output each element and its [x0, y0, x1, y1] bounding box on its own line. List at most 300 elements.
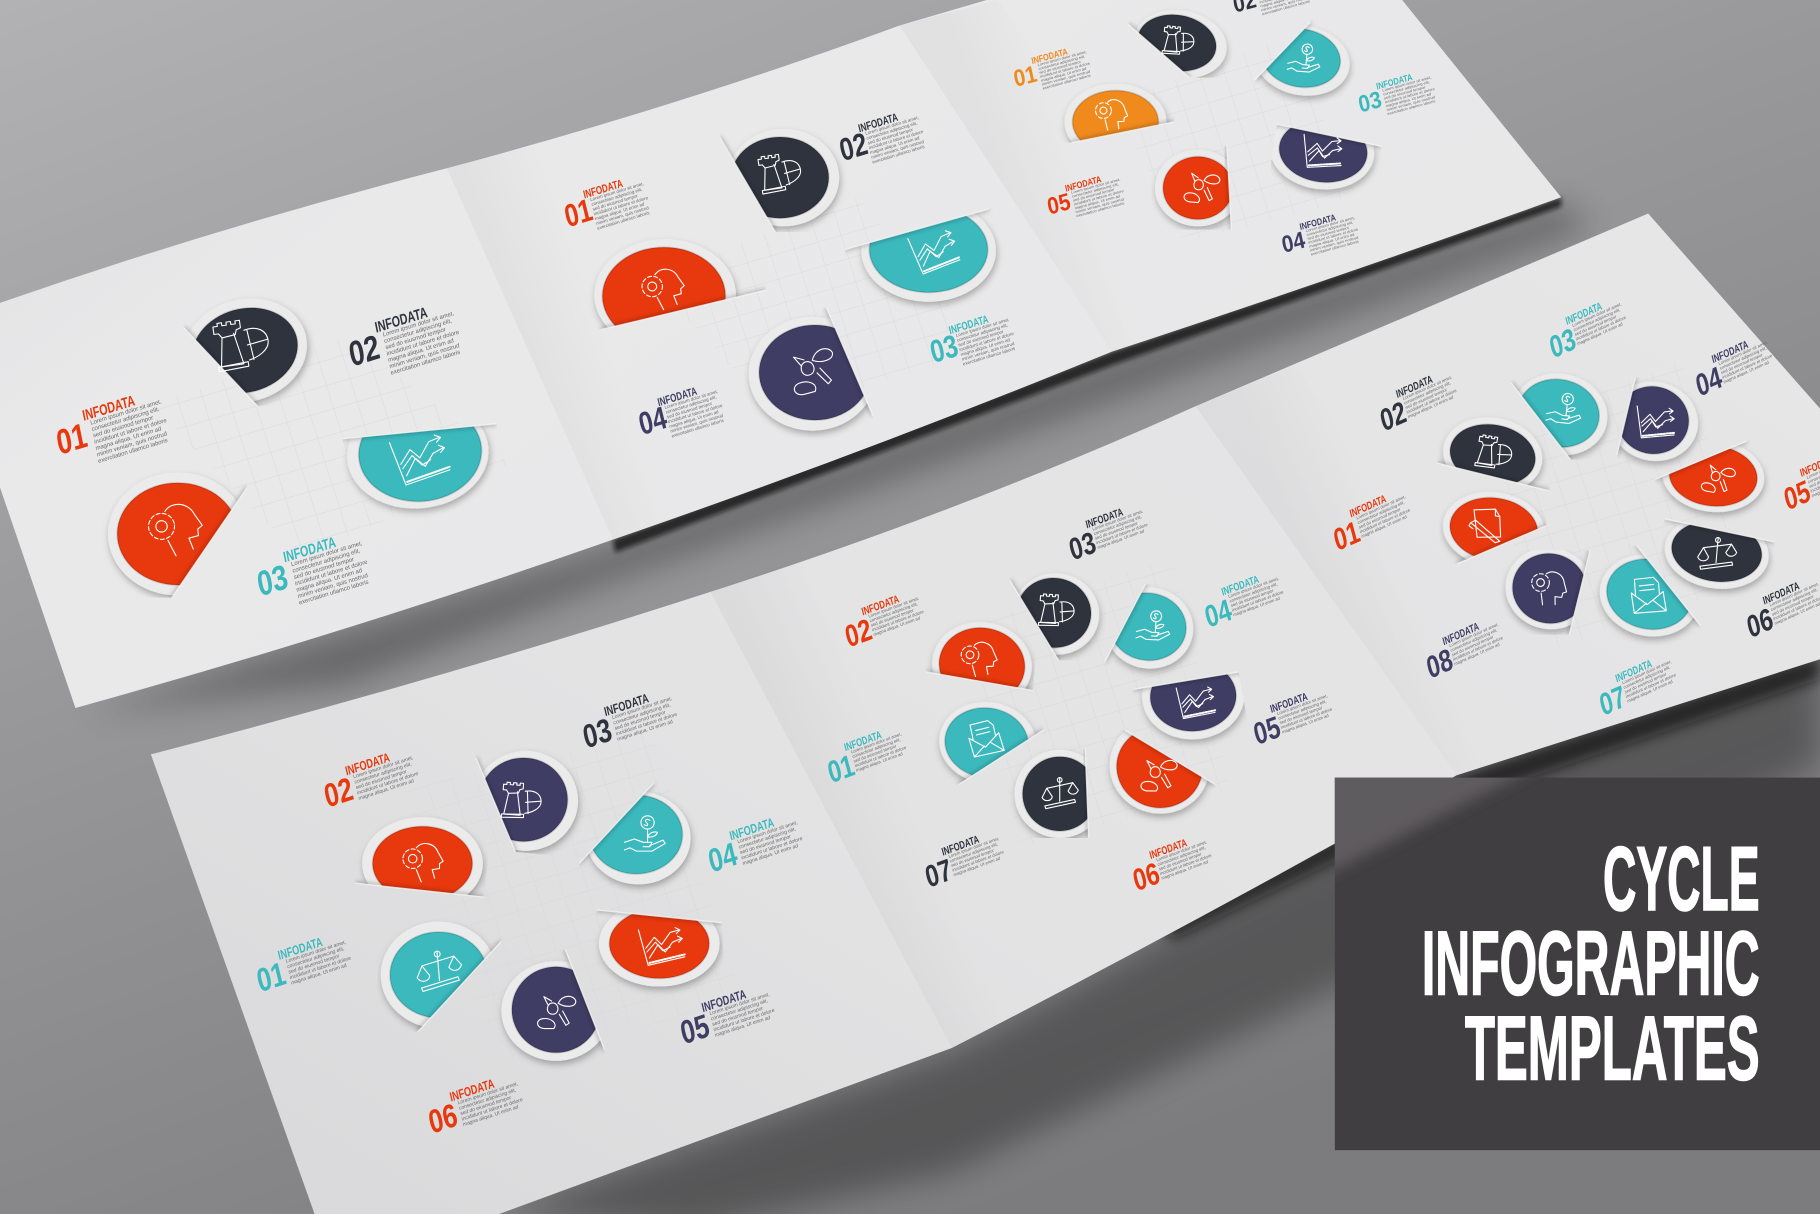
label 02 — [839, 586, 928, 654]
label 03: INFODATA — [1564, 300, 1604, 328]
label 07: magna aliqua. Ut enim ad — [1627, 678, 1674, 704]
panel: bottom sheet, seven step cycle — [822, 499, 1337, 898]
label 05: sed do eiusmod tempor — [1279, 705, 1323, 725]
label 02: INFODATA — [373, 303, 429, 336]
label 03 — [578, 684, 680, 756]
label 02: Lorem ipsum dolor sit amet, — [353, 755, 414, 780]
label 01: sed do eiusmod tempor — [592, 193, 639, 212]
label 03: INFODATA — [948, 313, 990, 338]
label 05: sed do eiusmod tempor — [1072, 187, 1116, 203]
label 02: minim veniam, quis nostrud — [389, 343, 460, 370]
label 05: Lorem ipsum dolor sit amet, — [1276, 693, 1328, 716]
label 02: exercitation ullamco laboris — [872, 144, 926, 165]
label 01: magna aliqua. Ut enim ad — [594, 201, 645, 221]
disc: teal envelope — [1596, 545, 1700, 644]
label 07 — [1594, 649, 1680, 723]
label 02: consectetur adipiscing elit, — [1403, 380, 1451, 406]
label 01: Lorem ipsum dolor sit amet, — [590, 181, 644, 202]
disc: navy scales — [1012, 748, 1090, 838]
disc: teal scales — [381, 922, 501, 1032]
title text — [1422, 829, 1760, 1099]
label 05: magna aliqua. Ut enim ad — [1074, 193, 1120, 210]
label 03: magna aliqua. Ut enim ad — [960, 337, 1011, 357]
label 06: consectetur adipiscing elit, — [1770, 587, 1818, 612]
label 01: consectetur adipiscing elit, — [1038, 54, 1085, 71]
label 04 — [634, 379, 727, 447]
shadow: upper sheet contact — [613, 197, 1561, 552]
label 03: magna aliqua. Ut enim ad — [617, 719, 674, 743]
label 04: 04 — [1201, 592, 1236, 634]
label 01: INFODATA — [81, 391, 137, 424]
label 03: exercitation ullamco laboris — [299, 579, 369, 607]
label 02: sed do eiusmod tempor — [870, 607, 915, 628]
label 03: consectetur adipiscing elit, — [613, 702, 671, 727]
label 01: Lorem ipsum dolor sit amet, — [1356, 494, 1406, 521]
label 04: INFODATA — [1299, 212, 1337, 232]
sheet: bottom brochure — [151, 214, 1820, 1214]
label 08: Lorem ipsum dolor sit amet, — [1449, 622, 1499, 648]
label 04 — [1690, 330, 1777, 403]
label 03: 03 — [927, 328, 962, 371]
label 03: exercitation ullamco laboris — [962, 346, 1016, 367]
label 05: magna aliqua. Ut enim ad — [714, 1015, 771, 1039]
label 03: incididunt ut labore et dolore — [1096, 522, 1149, 545]
disc: red bird — [1107, 730, 1216, 821]
label 01: magna aliqua. Ut enim ad — [1361, 514, 1408, 539]
label 03: sed do eiusmod tempor — [958, 329, 1004, 347]
label 01: incididunt ut labore et dolore — [289, 955, 352, 981]
disc: red head — [355, 818, 488, 898]
label 04: INFODATA — [656, 385, 698, 410]
label 01: magna aliqua. Ut enim ad — [1040, 66, 1087, 83]
label 01: Lorem ipsum dolor sit amet, — [90, 399, 162, 427]
disc: red head — [926, 622, 1035, 691]
label 03: magna aliqua. Ut enim ad — [1097, 528, 1145, 550]
label 05 — [1044, 168, 1127, 225]
label 01: INFODATA — [1030, 46, 1069, 66]
label 01: consectetur adipiscing elit, — [852, 737, 901, 759]
label 03: consectetur adipiscing elit, — [1383, 79, 1430, 97]
label 07: sed do eiusmod tempor — [950, 848, 995, 868]
label 01: exercitation ullamco laboris — [98, 438, 168, 465]
label 01: incididunt ut labore et dolore — [1359, 507, 1411, 534]
label 01: INFODATA — [582, 178, 624, 202]
label 04: Lorem ipsum dolor sit amet, — [737, 820, 798, 845]
disc: red chart — [597, 901, 722, 987]
label 05: consectetur adipiscing elit, — [1072, 181, 1119, 199]
label 03: Lorem ipsum dolor sit amet, — [1092, 508, 1144, 532]
label 05: minim veniam, quis nostrud — [1075, 197, 1124, 214]
label 04: 04 — [1279, 226, 1308, 258]
label 03: incididunt ut labore et dolore — [295, 559, 369, 587]
label 05: 05 — [1045, 188, 1073, 220]
label 05: INFODATA — [700, 988, 748, 1016]
label 06: Lorem ipsum dolor sit amet, — [457, 1081, 518, 1106]
disc: navy tower — [1128, 12, 1230, 78]
label 04 — [1199, 566, 1288, 634]
label 03: INFODATA — [603, 692, 650, 720]
label 02: INFODATA — [860, 593, 901, 619]
label 04: incididunt ut labore et dolore — [1308, 227, 1359, 245]
label 04: Lorem ipsum dolor sit amet, — [1305, 215, 1355, 233]
label 03: INFODATA — [1084, 506, 1125, 532]
label 04: INFODATA — [728, 816, 776, 844]
label 01: INFODATA — [277, 936, 324, 963]
label 01: magna aliqua. Ut enim ad — [95, 426, 162, 452]
label 01: sed do eiusmod tempor — [288, 953, 340, 976]
label 03 — [1063, 499, 1152, 567]
label 04: Lorem ipsum dolor sit amet, — [1718, 340, 1768, 366]
label 03: sed do eiusmod tempor — [1574, 314, 1617, 337]
label 06: consectetur adipiscing elit, — [1157, 845, 1206, 867]
label 05: INFODATA — [1269, 691, 1309, 716]
label 03: Lorem ipsum dolor sit amet, — [612, 696, 673, 721]
label 06: 06 — [1129, 855, 1163, 898]
label 01: magna aliqua. Ut enim ad — [855, 751, 904, 773]
label 05: magna aliqua. Ut enim ad — [1281, 713, 1330, 735]
shadow: upper sheet — [81, 203, 1590, 714]
label 03: incididunt ut labore et dolore — [615, 712, 678, 737]
label 02: magna aliqua. Ut enim ad — [873, 615, 921, 637]
label 03: 03 — [579, 712, 616, 756]
label 07: INFODATA — [1614, 658, 1653, 686]
label 02: exercitation ullamco laboris — [390, 350, 461, 377]
label 01: exercitation ullamco laboris — [597, 210, 651, 231]
label 02 — [344, 295, 464, 388]
label 04: 04 — [705, 836, 741, 880]
label 05: incididunt ut labore et dolore — [1280, 706, 1333, 730]
label 02: 02 — [841, 612, 875, 654]
label 03: consectetur adipiscing elit, — [957, 322, 1008, 343]
label 03: sed do eiusmod tempor — [1094, 520, 1139, 541]
label 02: consectetur adipiscing elit, — [869, 601, 918, 623]
label 05: sed do eiusmod tempor — [712, 1005, 764, 1028]
label 01: Lorem ipsum dolor sit amet, — [1037, 49, 1087, 67]
label 08: 08 — [1423, 641, 1456, 685]
label 01 — [560, 171, 653, 239]
label 02: consectetur adipiscing elit, — [354, 761, 412, 786]
label 04: incididunt ut labore et dolore — [668, 403, 723, 424]
label 02: sed do eiusmod tempor — [1405, 387, 1448, 410]
label 01: incididunt ut labore et dolore — [593, 195, 649, 216]
label 02: incididunt ut labore et dolore — [868, 129, 924, 150]
label 03: INFODATA — [1375, 71, 1413, 92]
label 01: minim veniam, quis nostrud — [1041, 69, 1091, 87]
label 05: INFODATA — [1064, 173, 1102, 194]
label 02: consectetur adipiscing elit, — [866, 120, 918, 141]
label 05 — [1248, 683, 1337, 752]
label 04: magna aliqua. Ut enim ad — [742, 843, 799, 867]
label 06: sed do eiusmod tempor — [460, 1095, 512, 1117]
label 04: sed do eiusmod tempor — [1307, 225, 1350, 241]
disc: teal coin — [1100, 582, 1198, 674]
label 05 — [1778, 444, 1820, 517]
label 07: consectetur adipiscing elit, — [949, 841, 998, 864]
label 01: sed do eiusmod tempor — [93, 415, 154, 439]
label 03: sed do eiusmod tempor — [1384, 84, 1427, 100]
label 06: INFODATA — [449, 1077, 496, 1105]
label 03: exercitation ullamco laboris — [1387, 98, 1436, 116]
label 06: INFODATA — [1762, 580, 1801, 608]
label 04 — [703, 809, 805, 880]
label 02: incididunt ut labore et dolore — [1406, 387, 1458, 415]
label 04: consectetur adipiscing elit, — [665, 394, 717, 415]
label 04: consectetur adipiscing elit, — [1719, 345, 1767, 371]
label 02 — [835, 105, 928, 173]
shadow: lower sheet — [499, 615, 1820, 1214]
label 04: consectetur adipiscing elit, — [1306, 220, 1354, 237]
label 06: incididunt ut labore et dolore — [1159, 852, 1213, 876]
disc: teal chart — [845, 200, 996, 302]
label 02: magna aliqua. Ut enim ad — [358, 778, 415, 802]
label 04: INFODATA — [1220, 573, 1260, 599]
label 02: magna aliqua. Ut enim ad — [388, 338, 454, 364]
label 06 — [1127, 830, 1216, 898]
label 03: Lorem ipsum dolor sit amet, — [955, 317, 1010, 338]
label 02: 02 — [345, 326, 383, 374]
label 04: 04 — [1692, 359, 1726, 403]
label 04 — [1278, 206, 1361, 263]
label 01: minim veniam, quis nostrud — [96, 431, 168, 459]
label 06: magna aliqua. Ut enim ad — [462, 1104, 519, 1128]
label 04: incididunt ut labore et dolore — [1722, 353, 1773, 380]
label 01 — [252, 928, 354, 1000]
label 03: minim veniam, quis nostrud — [1386, 94, 1435, 112]
disc: purple tower — [474, 751, 578, 852]
label 04: 04 — [635, 400, 670, 443]
label 06: Lorem ipsum dolor sit amet, — [1156, 839, 1207, 862]
label 06: consectetur adipiscing elit, — [458, 1087, 517, 1112]
label 03: 03 — [1356, 86, 1384, 118]
label 03: magna aliqua. Ut enim ad — [1385, 91, 1431, 108]
label 01: sed do eiusmod tempor — [853, 743, 897, 764]
label 04: consectetur adipiscing elit, — [738, 826, 797, 851]
label 03: Lorem ipsum dolor sit amet, — [1382, 75, 1432, 93]
label 04: exercitation ullamco laboris — [1310, 239, 1359, 257]
label 03: incididunt ut labore et dolore — [1575, 314, 1627, 342]
label 02: magna aliqua. Ut enim ad — [869, 135, 920, 155]
panel: top sheet, five step cycle — [1010, 0, 1438, 263]
disc: purple chart — [1271, 124, 1381, 196]
label 03: 03 — [1065, 525, 1099, 567]
label 03: minim veniam, quis nostrud — [961, 341, 1015, 362]
label 08: magna aliqua. Ut enim ad — [1454, 641, 1501, 667]
label 01: Lorem ipsum dolor sit amet, — [850, 731, 902, 754]
disc: red paper — [1438, 485, 1550, 573]
label 01: consectetur adipiscing elit, — [1357, 500, 1405, 525]
label 07 — [920, 826, 1008, 894]
label 05: Lorem ipsum dolor sit amet, — [709, 992, 770, 1017]
label 04: minim veniam, quis nostrud — [670, 413, 724, 434]
label 03: incididunt ut labore et dolore — [959, 331, 1015, 352]
label 03: incididunt ut labore et dolore — [1384, 86, 1435, 104]
label 01: consectetur adipiscing elit, — [591, 187, 643, 207]
label 07: incididunt ut labore et dolore — [952, 849, 1005, 873]
disc: orange head — [1062, 84, 1174, 144]
label 01: 01 — [561, 192, 596, 235]
shadow: lower sheet contact — [1161, 656, 1820, 940]
label 02: Lorem ipsum dolor sit amet, — [382, 311, 455, 339]
label 07: 07 — [1596, 678, 1629, 723]
panel: bottom sheet, eight step cycle — [1328, 291, 1820, 723]
label 02: incididunt ut labore et dolore — [386, 329, 460, 358]
label 03: 03 — [1546, 321, 1579, 365]
label 07: INFODATA — [940, 833, 981, 859]
label 02: incididunt ut labore et dolore — [357, 771, 419, 797]
label 01: incididunt ut labore et dolore — [94, 418, 168, 446]
label 06 — [424, 1070, 526, 1141]
label 03: minim veniam, quis nostrud — [297, 573, 368, 600]
label 01 — [51, 383, 172, 476]
label 03 — [926, 307, 1018, 375]
label 06: magna aliqua. Ut enim ad — [1161, 859, 1209, 881]
label 07: Lorem ipsum dolor sit amet, — [1622, 659, 1672, 685]
label 04: Lorem ipsum dolor sit amet, — [664, 389, 718, 410]
label 01: sed do eiusmod tempor — [1039, 59, 1082, 75]
label 04: sed do eiusmod tempor — [666, 401, 713, 419]
label 06: sed do eiusmod tempor — [1771, 593, 1815, 617]
title panel — [1312, 754, 1820, 1150]
disc: navy scales — [1662, 518, 1774, 596]
label 03: Lorem ipsum dolor sit amet, — [291, 541, 363, 568]
label 05: Lorem ipsum dolor sit amet, — [1071, 177, 1121, 195]
disc: purple bird — [749, 308, 876, 431]
disc: red head — [592, 240, 766, 330]
disc: navy tower — [1010, 577, 1104, 660]
label 02: Lorem ipsum dolor sit amet, — [1402, 374, 1452, 401]
label 04: minim veniam, quis nostrud — [1309, 235, 1359, 253]
label 06 — [1741, 571, 1820, 645]
label 04: magna aliqua. Ut enim ad — [1233, 595, 1281, 617]
label 06: Lorem ipsum dolor sit amet, — [1769, 581, 1819, 608]
label 06: 06 — [425, 1097, 461, 1141]
disc: teal coin — [1249, 18, 1355, 103]
label 04: exercitation ullamco laboris — [671, 418, 725, 439]
label 04: incididunt ut labore et dolore — [741, 836, 803, 862]
label 02: magna aliqua. Ut enim ad — [1407, 394, 1454, 419]
disc: navy tower — [183, 298, 312, 406]
label 05: 05 — [677, 1008, 713, 1052]
label 01: incididunt ut labore et dolore — [854, 745, 907, 768]
label 04: sed do eiusmod tempor — [1720, 352, 1764, 375]
label 01: Lorem ipsum dolor sit amet, — [285, 940, 347, 965]
disc: teal envelope — [936, 702, 1044, 785]
label 08 — [1421, 612, 1507, 685]
label 02: sed do eiusmod tempor — [355, 769, 408, 791]
label 05 — [675, 980, 778, 1052]
label 01: minim veniam, quis nostrud — [596, 205, 650, 226]
label 06: 06 — [1743, 601, 1777, 645]
label 08: sed do eiusmod tempor — [1451, 634, 1494, 657]
label 03: Lorem ipsum dolor sit amet, — [1572, 301, 1622, 328]
label 02: incididunt ut labore et dolore — [872, 609, 925, 632]
label 01: consectetur adipiscing elit, — [91, 407, 160, 433]
label 02: Lorem ipsum dolor sit amet, — [865, 115, 919, 136]
label 01: 01 — [1330, 514, 1363, 558]
label 02 — [1229, 0, 1312, 23]
label 02: sed do eiusmod tempor — [385, 327, 446, 351]
disc: purple bird — [501, 949, 611, 1061]
label 05: 05 — [1780, 473, 1814, 517]
panel: top sheet, four step cycle — [560, 105, 1018, 447]
label 01: 01 — [253, 955, 289, 1000]
label 02: consectetur adipiscing elit, — [384, 318, 453, 345]
panel: bottom sheet, six step cycle — [252, 684, 805, 1141]
label 03: consectetur adipiscing elit, — [1573, 307, 1621, 332]
panel: top sheet, three step cycle — [51, 285, 497, 617]
disc: teal coin — [579, 783, 691, 884]
label 01: INFODATA — [843, 729, 883, 755]
label 03 — [252, 525, 373, 617]
label 01: sed do eiusmod tempor — [1358, 506, 1402, 530]
disc: red bird — [1655, 435, 1768, 517]
label 02: INFODATA — [344, 751, 391, 779]
label 03: 03 — [254, 556, 291, 604]
label 04: sed do eiusmod tempor — [739, 834, 792, 856]
label 03: consectetur adipiscing elit, — [1093, 514, 1142, 536]
label 02: 02 — [1376, 394, 1410, 438]
label 02: 02 — [321, 771, 357, 815]
label 07: 07 — [921, 852, 955, 894]
disc: teal coin — [1511, 378, 1612, 460]
label 02: minim veniam, quis nostrud — [871, 139, 925, 160]
label 01: 01 — [1011, 60, 1039, 92]
label 06: magna aliqua. Ut enim ad — [1774, 601, 1820, 626]
disc: navy tower — [720, 129, 839, 232]
label 01: 01 — [824, 747, 858, 790]
label 01 — [1328, 484, 1414, 558]
label 04: consectetur adipiscing elit, — [1229, 581, 1278, 604]
label 02: sed do eiusmod tempor — [867, 127, 914, 146]
label 01: 01 — [53, 415, 90, 463]
label 06: INFODATA — [1148, 837, 1188, 863]
label 07: sed do eiusmod tempor — [1624, 671, 1667, 695]
label 02 — [1375, 365, 1461, 438]
label 02: Lorem ipsum dolor sit amet, — [868, 596, 920, 619]
label 01: incididunt ut labore et dolore — [1040, 61, 1090, 79]
label 05: consectetur adipiscing elit, — [710, 998, 769, 1023]
disc: red head — [108, 472, 247, 598]
label 03: magna aliqua. Ut enim ad — [1577, 321, 1624, 346]
sheet: top brochure — [0, 0, 1561, 708]
label 03: sed do eiusmod tempor — [293, 557, 355, 581]
label 05: incididunt ut labore et dolore — [713, 1008, 775, 1033]
label 04: magna aliqua. Ut enim ad — [1309, 232, 1355, 249]
disc: teal chart — [342, 423, 496, 516]
label 04: sed do eiusmod tempor — [1230, 588, 1275, 608]
label 01: INFODATA — [1348, 493, 1388, 521]
disc: navy tower — [1437, 410, 1550, 500]
label 07: magna aliqua. Ut enim ad — [953, 855, 1001, 877]
label 03: magna aliqua. Ut enim ad — [296, 568, 363, 594]
label 01 — [1010, 41, 1093, 97]
label 06: incididunt ut labore et dolore — [461, 1097, 524, 1123]
label 03 — [1355, 66, 1438, 123]
label 07: Lorem ipsum dolor sit amet, — [948, 836, 1000, 859]
label 01: exercitation ullamco laboris — [1042, 73, 1091, 91]
label 06: sed do eiusmod tempor — [1158, 851, 1203, 872]
label 08: incididunt ut labore et dolore — [1452, 635, 1504, 662]
label 08: consectetur adipiscing elit, — [1450, 627, 1498, 653]
label 08: INFODATA — [1441, 620, 1481, 649]
label 01 — [822, 722, 911, 790]
label 01: consectetur adipiscing elit, — [287, 946, 345, 970]
label 03: sed do eiusmod tempor — [614, 710, 667, 732]
label 02: INFODATA — [857, 112, 899, 136]
label 02: 02 — [836, 126, 871, 169]
disc: purple chart — [1133, 672, 1246, 746]
disc: purple chart — [1616, 377, 1702, 468]
